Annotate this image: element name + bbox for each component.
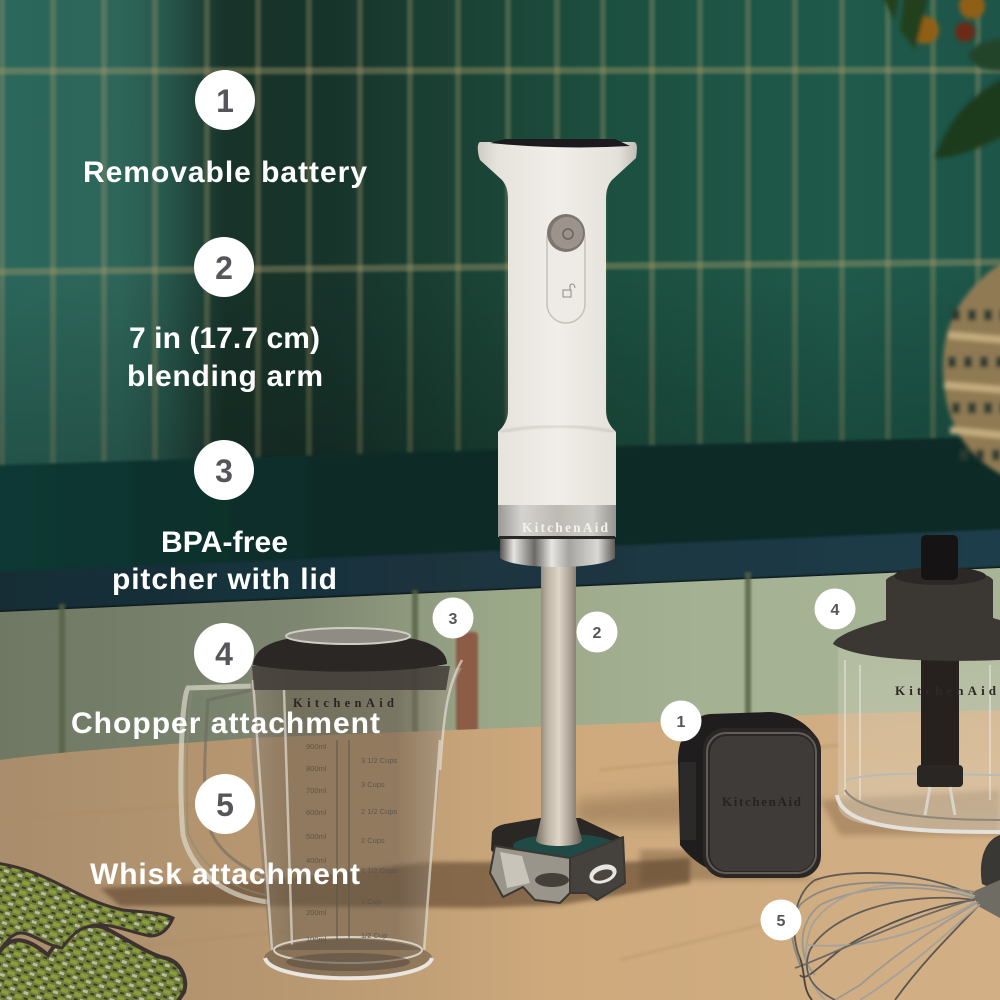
chrome collar xyxy=(500,539,615,567)
towel upper fold xyxy=(0,863,173,955)
blending shaft xyxy=(536,565,582,846)
callout 3 label: BPA-free xyxy=(161,526,288,559)
left column labels xyxy=(71,70,380,891)
small marker 3: 3 xyxy=(449,611,458,628)
measurement scale: 900ml xyxy=(306,742,327,751)
small marker 5: 5 xyxy=(777,913,786,930)
tiled green wall xyxy=(0,0,1000,480)
measurement scale: 1 1/2 Cups xyxy=(361,866,398,875)
decorative plant xyxy=(878,0,1000,158)
chopper attachment xyxy=(833,535,1000,832)
power button xyxy=(547,214,585,252)
measurement scale: 100ml xyxy=(306,935,327,944)
whisk wires xyxy=(792,873,980,1000)
chopper lid xyxy=(833,570,1000,661)
towel lower fold xyxy=(0,926,185,1000)
small marker 3 xyxy=(432,598,474,638)
towel xyxy=(0,863,185,1000)
battery pack xyxy=(678,712,821,878)
table shadow band xyxy=(100,790,1000,908)
callout 2 label: blending arm xyxy=(127,360,323,393)
pitcher lid xyxy=(253,637,447,672)
chopper bowl xyxy=(838,645,1000,830)
small marker 4: 4 xyxy=(831,602,840,619)
pitcher handle xyxy=(181,686,268,902)
drive post xyxy=(921,535,958,580)
small marker 1 xyxy=(660,700,702,742)
measurement scale: 400ml xyxy=(306,856,327,865)
small marker 2: 2 xyxy=(593,625,602,642)
callout 5 label: Whisk attachment xyxy=(90,858,360,891)
callout 4 badge xyxy=(194,623,254,683)
measurement scale: 800ml xyxy=(306,764,327,773)
pitcher base xyxy=(264,937,432,978)
measurement scale: 1 Cup xyxy=(361,897,381,906)
battery logo: KitchenAid xyxy=(722,794,802,809)
pitcher with lid xyxy=(181,628,462,978)
battery slot top xyxy=(490,139,630,147)
callout 3 badge xyxy=(194,440,254,500)
callout 5 badge xyxy=(195,774,255,834)
callout 2 badge xyxy=(194,237,254,297)
small marker 5 xyxy=(760,900,802,940)
measurement scale: 700ml xyxy=(306,786,327,795)
callout 1 badge: 1 xyxy=(216,83,234,119)
measurement scale: 200ml xyxy=(306,908,327,917)
callout 2 badge: 2 xyxy=(215,250,233,286)
whisk handle xyxy=(981,835,1000,892)
callout 5 badge: 5 xyxy=(216,787,234,823)
measurement scale xyxy=(306,740,398,944)
small marker 1: 1 xyxy=(677,714,686,731)
measurement scale: 500ml xyxy=(306,832,327,841)
measurement scale: 600ml xyxy=(306,808,327,817)
whisk attachment xyxy=(792,835,1000,1000)
blade guard back xyxy=(491,818,622,860)
dark countertop xyxy=(0,436,1000,613)
pitcher rim band xyxy=(252,666,450,690)
chopper bowl base xyxy=(837,774,1000,832)
motor body xyxy=(478,142,637,505)
measurement scale: 3 1/2 Cups xyxy=(361,756,398,765)
chopper logo: KitchenAid xyxy=(895,683,997,698)
callout 3 label xyxy=(112,526,337,596)
hand blender xyxy=(478,139,637,903)
callout 3 label: pitcher with lid xyxy=(112,563,337,596)
measurement scale: 3 Cups xyxy=(361,780,385,789)
measurement scale: 2 Cups xyxy=(361,836,385,845)
sage cabinets xyxy=(0,568,1000,770)
chopper stem xyxy=(917,650,963,815)
measurement scale: 1/2 Cup xyxy=(361,931,387,940)
small marker 4 xyxy=(814,588,856,630)
callout 2 label: 7 in (17.7 cm) xyxy=(129,322,320,355)
small marker 2 xyxy=(576,612,618,652)
wooden table xyxy=(0,710,1000,1000)
callout 1 badge xyxy=(195,70,255,130)
pitcher logo: KitchenAid xyxy=(293,696,394,710)
metal band xyxy=(498,505,616,537)
pitcher body xyxy=(250,668,462,950)
callout 3 badge: 3 xyxy=(215,453,233,489)
callout 1 label: Removable battery xyxy=(83,156,367,189)
measurement scale: 2 1/2 Cups xyxy=(361,807,398,816)
callout 2 label xyxy=(127,322,323,393)
callout 4 label: Chopper attachment xyxy=(71,707,380,740)
blade guard front xyxy=(490,837,625,903)
copper bottle behind pitcher xyxy=(456,632,478,732)
brand on band: KitchenAid xyxy=(522,520,608,535)
callout 4 badge: 4 xyxy=(215,636,233,672)
lid clear cap xyxy=(286,628,410,644)
lock panel xyxy=(547,220,585,323)
decorative woven vase xyxy=(943,245,1000,486)
